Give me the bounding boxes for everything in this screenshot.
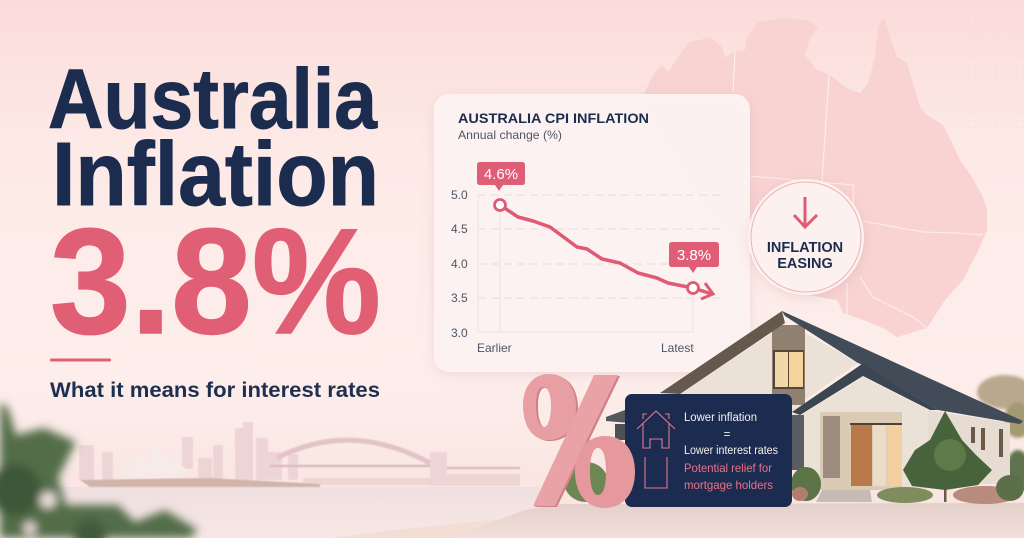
icon: house outline [637,411,675,488]
callout 4.6% [477,162,525,191]
chart gridlines [478,195,724,298]
inflation easing badge [748,179,864,295]
percent: lower ring [575,436,635,508]
chart y axis labels: 5.0 [451,188,468,202]
chart y axis labels: 3.5 [451,291,468,305]
chart x axis labels [477,341,694,355]
chart x axis labels: Latest [661,341,694,355]
chart y axis labels: 3.0 [451,326,468,340]
blurred foreground tree [0,402,198,538]
Sydney skyline [79,422,520,487]
map of Australia [640,18,987,337]
chart card [434,94,750,372]
dotted texture [965,14,1024,134]
chart heading: AUSTRALIA CPI INFLATION [458,110,649,126]
headline figure: 3.8% [50,197,381,365]
house: porch [820,412,902,490]
chart x axis labels: Earlier [477,341,512,355]
card text: = [724,429,731,441]
icon: down arrow [794,197,817,227]
callout 3.8%: 3.8% [677,247,711,264]
house: steps [816,490,872,502]
badge text: INFLATION [767,240,843,256]
shrub behind percent [564,462,608,502]
opera house [120,445,187,477]
chart axes [478,195,693,332]
card text: mortgage holders [684,478,773,492]
title: Australia Inflation: Australia [48,52,378,146]
house: shrubs [791,467,1024,504]
end marker [688,282,698,294]
shoreline sand [330,518,520,538]
house: dark side band [792,415,804,470]
house: upper cladding and window [772,325,805,405]
chart subheading: Annual change (%) [458,128,562,142]
chart line [500,205,712,294]
percent: upper ring [523,374,576,440]
navy info card [625,394,792,507]
title: Australia Inflation: Inflation [52,125,379,225]
foreground ground [450,503,1024,538]
callout 4.6%: 4.6% [484,166,518,183]
background trees behind house [977,375,1024,490]
title: Australia Inflation [48,52,379,225]
callout 3.8% [669,242,719,273]
chart y axis labels [451,188,468,340]
house: garden tree [903,411,992,502]
card text [684,412,778,492]
subtitle: What it means for interest rates [50,379,380,402]
3D percent sculpture [523,374,635,508]
house [606,311,1024,504]
water [0,487,540,538]
badge text: EASING [777,256,833,272]
card text: Potential relief for [684,461,772,475]
house: front gable roof [792,364,938,415]
badge text [767,240,843,272]
card text: Lower interest rates [684,445,778,457]
house: far-left low roof [606,410,640,424]
house: front gable wall [805,377,928,490]
house: side wall [928,410,1010,484]
house: main gable wall [680,333,858,470]
house: main roof [782,311,1023,424]
start marker [494,200,506,210]
chart arrow head [701,283,713,299]
house: side windows [971,427,1003,457]
chart y axis labels: 4.5 [451,222,468,236]
percent: slash [533,375,618,506]
card text: Lower inflation [684,412,757,424]
accent rule [50,358,111,362]
percent: depth layer [525,375,620,507]
chart y axis labels: 4.0 [451,257,468,271]
house: left gable trim [660,311,785,394]
